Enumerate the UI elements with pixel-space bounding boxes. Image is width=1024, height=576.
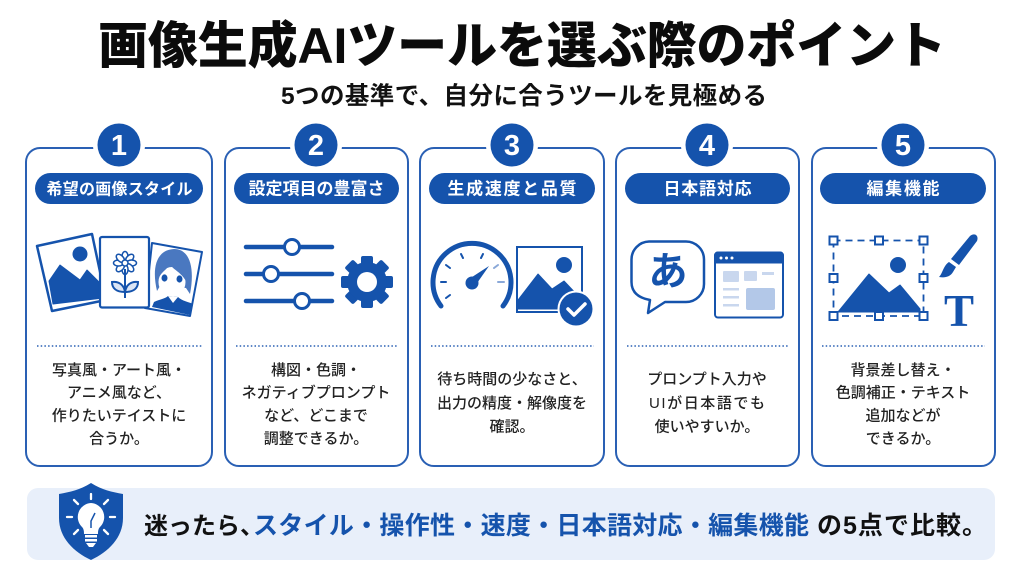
description 5 — [836, 361, 970, 448]
description 3: 出力の精度・解像度を — [437, 395, 587, 412]
panel: 生成速度と品質 — [420, 119, 604, 466]
panel: 設定項目の豊富さ — [225, 119, 408, 466]
description 2: 構図・色調・ — [271, 361, 361, 379]
description 4: プロンプト入力や — [647, 371, 767, 388]
number badge 1: 1 — [111, 130, 127, 162]
summary text: 迷ったら、 — [144, 513, 264, 540]
description 2: など、どこまで — [264, 408, 368, 424]
heading pill 5 — [820, 173, 986, 204]
heading pill 1: 希望の画像スタイル — [46, 180, 192, 198]
number badge 5: 5 — [895, 130, 911, 162]
number badge 3: 3 — [504, 130, 520, 162]
heading pill 4: 日本語対応 — [664, 180, 752, 198]
description 3: 確認。 — [489, 418, 535, 436]
subtitle: 5つの基準で、自分に合うツールを見極める — [281, 82, 767, 110]
panel: 希望の画像スタイル — [26, 119, 212, 466]
icon: selected image, brush and T — [830, 234, 978, 336]
icon: speech bubble and browser window: あ — [648, 251, 688, 294]
number badge 3 — [486, 119, 538, 171]
description 4 — [647, 371, 767, 436]
heading pill 3 — [429, 173, 595, 204]
panel: 編集機能 — [812, 119, 995, 466]
summary text: の5点で比較。 — [817, 512, 987, 540]
description 5: できるか。 — [866, 430, 940, 448]
icon: selected image, brush and T: T — [944, 286, 974, 336]
number badge 1 — [93, 119, 145, 171]
description 2: 調整できるか。 — [264, 430, 368, 448]
icon: speedometer and checked image — [433, 243, 594, 328]
icon: photo, flower and anime cards — [37, 234, 202, 316]
icon: shield with light bulb — [59, 483, 123, 560]
callout: summary bar — [27, 483, 995, 560]
heading pill 5: 編集機能 — [866, 178, 940, 198]
heading pill 4 — [625, 173, 790, 204]
description 2: ネガティブプロンプト — [242, 384, 390, 402]
description 1: 作りたいテイストに — [52, 408, 186, 424]
description 1: 写真風・アート風・ — [52, 361, 186, 379]
number badge 2: 2 — [308, 130, 324, 162]
description 4: UIが日本語でも — [649, 394, 765, 412]
description 5: 追加などが — [865, 406, 941, 424]
description 3: 待ち時間の少なさと、 — [437, 371, 587, 388]
number badge 4 — [681, 119, 733, 171]
description 3 — [437, 371, 587, 436]
description 2 — [242, 361, 390, 448]
description 5: 背景差し替え・ — [850, 361, 956, 379]
number badge 2 — [290, 119, 342, 171]
summary text: スタイル・操作性・速度・日本語対応・編集機能 — [253, 512, 809, 540]
heading pill 1 — [35, 173, 203, 204]
heading pill 2 — [234, 173, 399, 204]
panel: 日本語対応 — [616, 119, 799, 466]
description 1: 合うか。 — [89, 430, 149, 448]
description 1: アニメ風など、 — [67, 384, 171, 402]
number badge 5 — [877, 119, 929, 171]
number badge 4: 4 — [699, 130, 715, 162]
heading pill 2: 設定項目の豊富さ — [248, 178, 384, 198]
icon: speech bubble and browser window — [632, 242, 783, 318]
description 1 — [52, 361, 186, 448]
title: 画像生成AIツールを選ぶ際のポイント — [98, 18, 946, 74]
description 4: 使いやすいか。 — [655, 418, 759, 436]
heading pill 3: 生成速度と品質 — [448, 178, 576, 198]
summary text — [144, 512, 987, 540]
icon: sliders and gear — [246, 240, 393, 308]
description 5: 色調補正・テキスト — [836, 384, 970, 402]
